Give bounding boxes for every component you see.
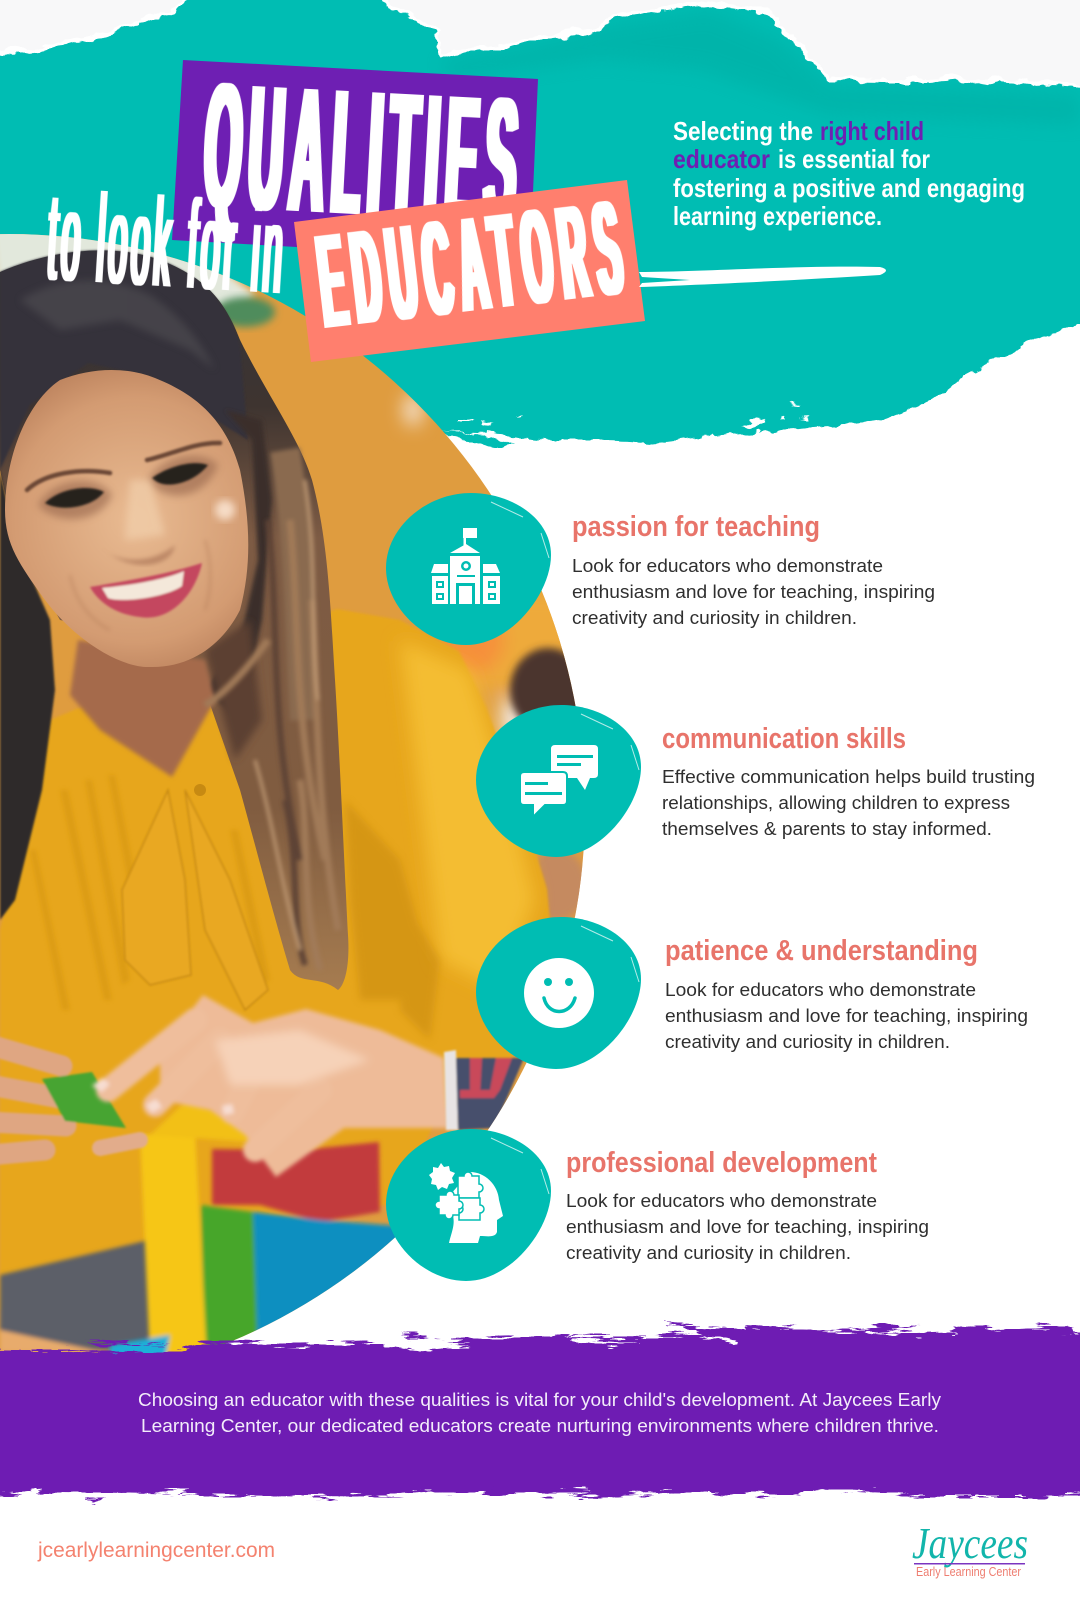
description: Look for educators who demonstrate — [566, 1190, 877, 1211]
description: enthusiasm and love for teaching, inspiring — [572, 581, 935, 602]
icon: speech bubbles on teal blob — [476, 705, 641, 857]
white brush stroke — [639, 267, 886, 287]
bracelet and watch strap — [444, 1050, 524, 1130]
title line: to look for in: to look for in — [44, 165, 291, 321]
description: relationships, allowing children to express — [662, 792, 1010, 813]
toy blocks — [110, 1100, 400, 1360]
description — [566, 1190, 929, 1263]
logo: Jaycees Early Learning Center: Jaycees — [912, 1519, 1028, 1568]
title word: EDUCATORS: EDUCATORS — [311, 171, 637, 356]
description: enthusiasm and love for teaching, inspiring — [665, 1005, 1028, 1026]
intro text: learning experience. — [673, 201, 882, 231]
intro text — [673, 116, 1025, 231]
intro text: educator — [673, 144, 770, 174]
torn paper top edge — [0, 0, 1080, 87]
heading: professional development — [566, 1147, 877, 1179]
website url: jcearlylearningcenter.com — [37, 1539, 275, 1562]
hair back — [0, 250, 348, 990]
intro text: Selecting the — [673, 116, 813, 146]
item: patience and understanding — [476, 917, 1028, 1069]
purple closing band — [0, 1322, 1080, 1503]
eyebrows — [27, 443, 220, 490]
eye shadows — [38, 456, 218, 519]
left hand and green block — [0, 1045, 140, 1155]
closing statement — [138, 1389, 942, 1436]
jeans and table — [0, 1238, 152, 1352]
icon: head with puzzle pieces on teal blob — [386, 1129, 551, 1281]
description: creativity and curiosity in children. — [572, 607, 857, 628]
item: professional development — [386, 1129, 929, 1281]
description: Look for educators who demonstrate — [665, 979, 976, 1000]
description: Look for educators who demonstrate — [572, 555, 883, 576]
photo background — [0, 220, 600, 1360]
title background: purple panel — [172, 60, 538, 260]
item: passion for teaching — [386, 493, 935, 645]
hair strands — [205, 450, 338, 970]
item: communication skills — [476, 705, 1035, 857]
teal torn header panel — [0, 0, 1080, 446]
neck — [70, 640, 215, 777]
shirt — [0, 609, 551, 1310]
description: themselves & parents to stay informed. — [662, 818, 992, 839]
description: creativity and curiosity in children. — [566, 1242, 851, 1263]
heading: patience & understanding — [665, 935, 978, 967]
icon: school on teal blob — [386, 493, 551, 645]
description — [665, 979, 1028, 1052]
closing statement: Choosing an educator with these qualities is vital for your child's development. At Jaycees Early — [138, 1389, 942, 1410]
intro text: fostering a positive and engaging — [673, 173, 1025, 203]
title word: QUALITIES: QUALITIES — [200, 45, 530, 261]
description — [662, 766, 1035, 839]
smile — [90, 563, 202, 618]
description: creativity and curiosity in children. — [665, 1031, 950, 1052]
logo: Jaycees Early Learning Center: Early Learning Center — [916, 1565, 1021, 1579]
description: Effective communication helps build trusting — [662, 766, 1035, 787]
eyes — [45, 463, 208, 508]
intro text: is essential for — [778, 144, 930, 174]
intro text: right child — [820, 116, 924, 146]
smile crease — [206, 544, 208, 550]
heading: passion for teaching — [572, 511, 820, 543]
description — [572, 555, 935, 628]
title background: coral panel — [294, 180, 645, 362]
description: enthusiasm and love for teaching, inspiring — [566, 1216, 929, 1237]
face — [5, 370, 248, 667]
icon: smiley on teal blob — [476, 917, 641, 1069]
heading: communication skills — [662, 723, 906, 755]
right hand and arm — [92, 995, 448, 1177]
photo: teacher playing with blocks — [0, 220, 600, 1360]
closing statement: Learning Center, our dedicated educators create nurturing environments where children thrive. — [141, 1415, 939, 1436]
nose — [116, 478, 176, 566]
